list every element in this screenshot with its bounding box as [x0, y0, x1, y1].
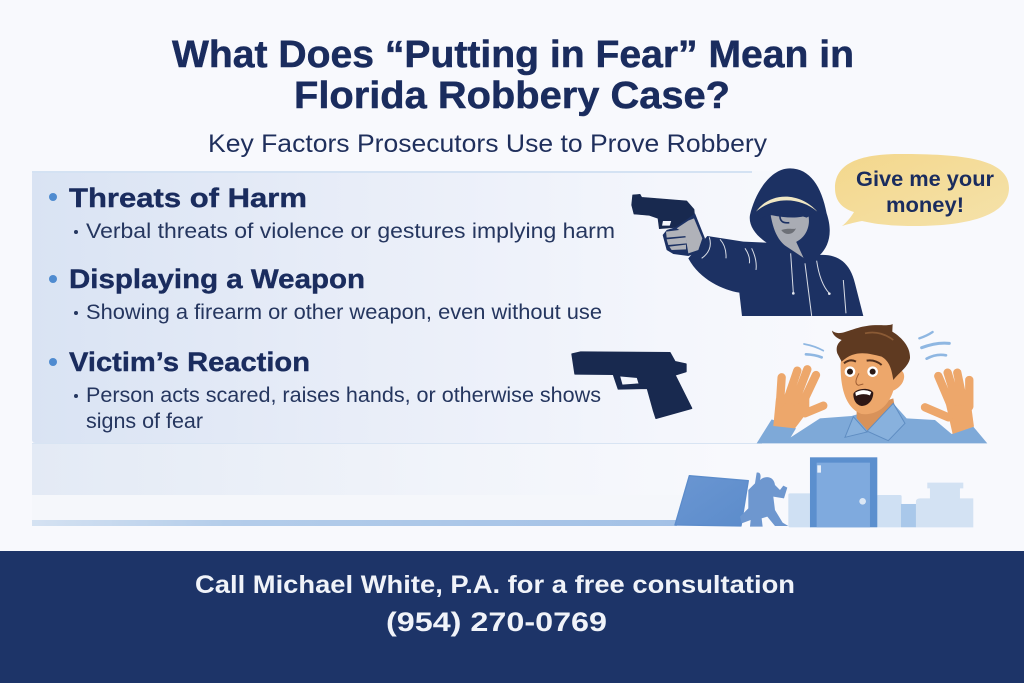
icon: hooded robber with handgun: [632, 168, 863, 316]
factor: threats of harm: Verbal threats of violence or gestures implying harm: [86, 219, 615, 243]
speech bubble: [835, 154, 1009, 226]
title: Florida Robbery Case?: [294, 75, 730, 117]
footer banner: (954) 270-0769: [386, 607, 607, 637]
icon: frightened man: [757, 324, 987, 443]
subtitle: Key Factors Prosecutors Use to Prove Robbery: [208, 130, 768, 158]
panel: factors background: [32, 171, 832, 526]
factor: victim's reaction: Victim’s Reaction: [69, 347, 310, 377]
footer banner: Call Michael White, P.A. for a free consultation: [195, 571, 795, 599]
title: What Does “Putting in Fear” Mean in: [172, 34, 854, 76]
right hand: [925, 373, 974, 434]
factor: victim's reaction: Person acts scared, raises hands, or otherwise shows: [86, 383, 601, 407]
factor: threats of harm: Threats of Harm: [69, 183, 307, 213]
factor: displaying a weapon: Showing a firearm or other weapon, even without use: [86, 300, 602, 324]
speech bubble: Give me your: [856, 168, 994, 191]
eyes: [845, 366, 855, 377]
door: [810, 457, 877, 527]
factor: threats of harm: [49, 183, 615, 243]
title: [172, 34, 854, 117]
fleeing silhouette: [740, 473, 788, 527]
handgun: [632, 194, 695, 229]
speech bubble: money!: [886, 194, 964, 217]
factor: victim's reaction: [49, 347, 601, 433]
mouth: [853, 389, 873, 406]
hair: [832, 324, 910, 380]
shirt: [757, 403, 987, 443]
neck and face: [857, 398, 895, 432]
gripping hand: [663, 213, 705, 256]
icon: pistol: [572, 352, 692, 418]
scene: escape silhouette and storefront: [675, 457, 973, 527]
footer banner: [0, 551, 1024, 683]
factor: displaying a weapon: Displaying a Weapon: [69, 264, 365, 294]
factor: displaying a weapon: [49, 264, 602, 324]
left hand: [773, 369, 823, 428]
fear marks: [804, 332, 949, 359]
broken window: [675, 476, 748, 526]
cash register: [916, 483, 973, 527]
factor: victim's reaction: signs of fear: [86, 409, 203, 433]
